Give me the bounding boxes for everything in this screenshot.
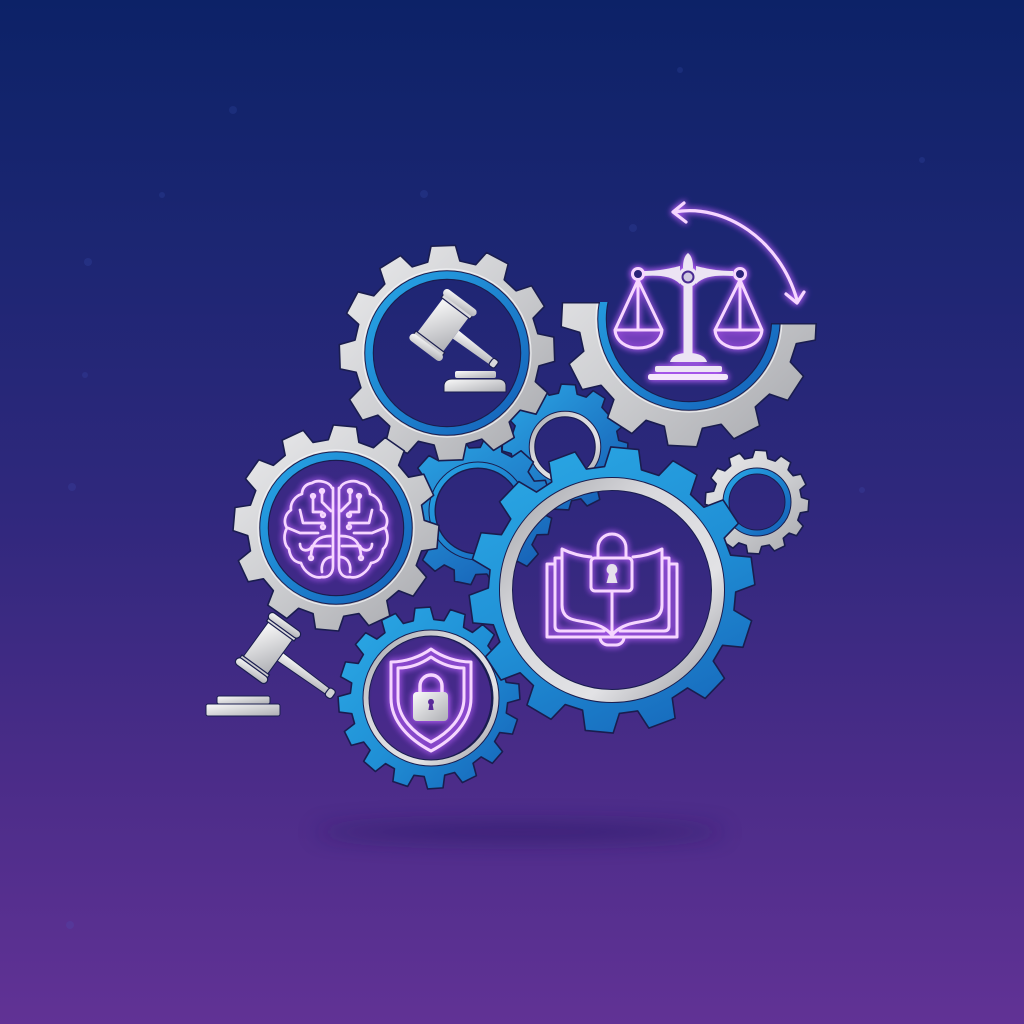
ground shadow <box>315 822 725 842</box>
icon: brain with circuits <box>285 481 387 577</box>
gear: scales half gear <box>560 302 817 448</box>
background specks <box>66 67 925 929</box>
gear: book gear <box>433 411 791 769</box>
gear: shield gear <box>332 601 526 795</box>
icon: gavel in gear <box>408 287 516 392</box>
gear: gavel gear <box>336 242 558 464</box>
icon: scales of justice <box>615 253 762 380</box>
icon: open book with padlock <box>547 534 677 645</box>
icon: lower gavel and block <box>206 611 352 721</box>
gear: brain gear <box>225 417 447 639</box>
gear: small silver right <box>702 447 812 557</box>
gear: rear blue left <box>391 424 565 598</box>
icon: shield with padlock <box>391 649 471 751</box>
gear: rear blue upper <box>499 381 631 513</box>
icon: rotation arrow <box>673 203 804 303</box>
